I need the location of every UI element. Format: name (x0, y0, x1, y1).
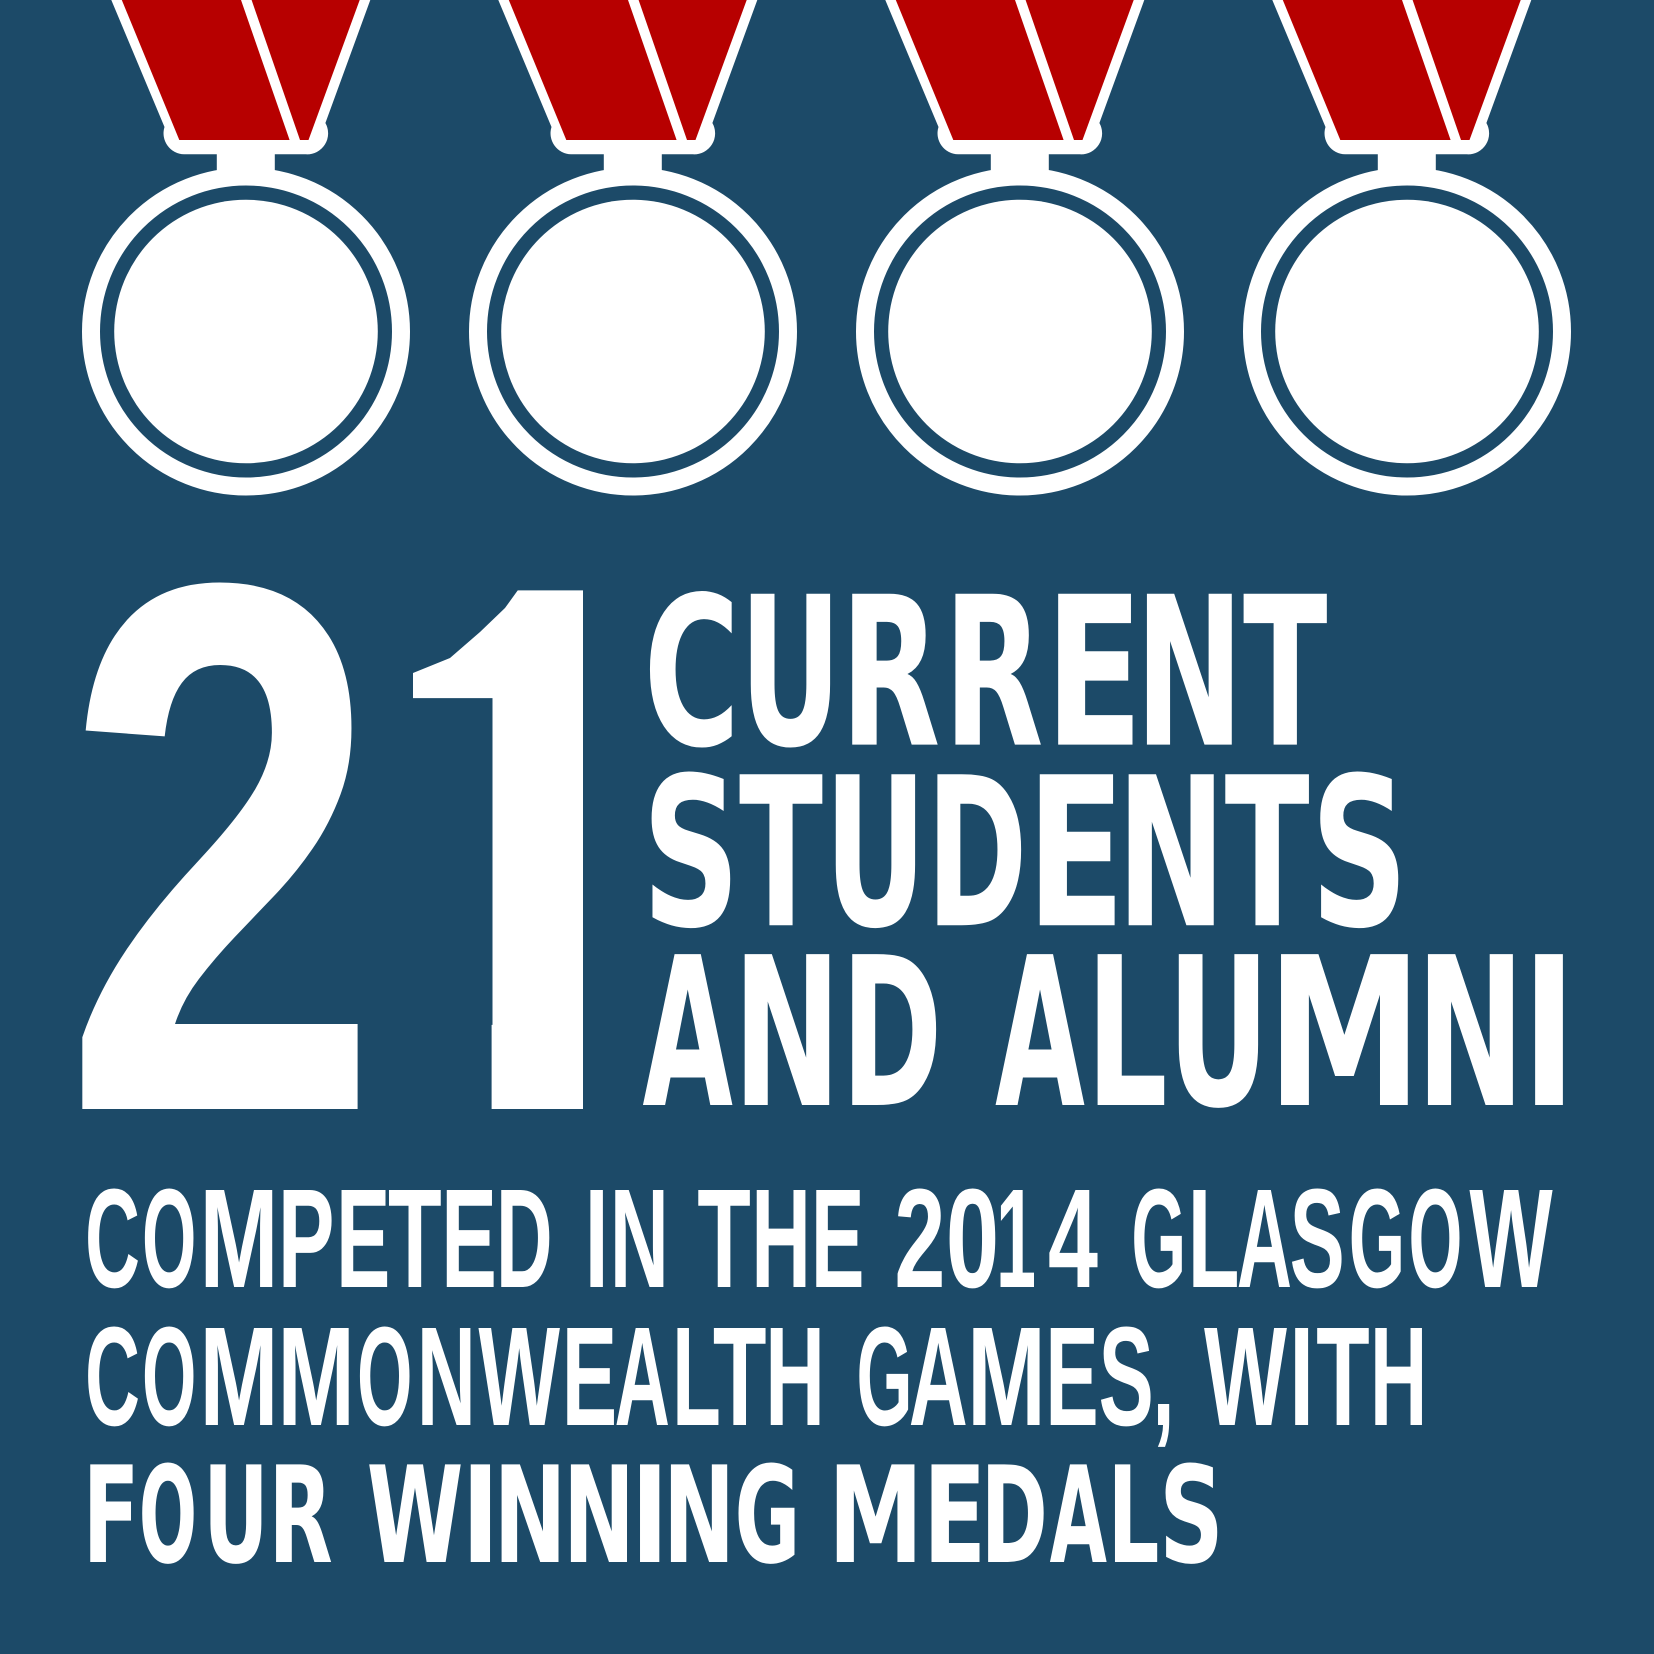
text line: COMPETED IN THE 2014 GLASGOW: D (496, 1159, 553, 1317)
text line: FOUR WINNING MEDALS: R (268, 1438, 333, 1594)
heading line: CURRENT: E (1045, 553, 1143, 794)
icon: medal 4 (1252, 0, 1562, 486)
heading line: CURRENT: T (1243, 553, 1328, 794)
big number 21: 2 (62, 426, 380, 1269)
text line: COMPETED IN THE 2014 GLASGOW: T (388, 1159, 442, 1317)
text line: COMPETED IN THE 2014 GLASGOW: N (610, 1159, 669, 1317)
heading line: STUDENTS: E (1026, 733, 1125, 974)
text line: COMPETED IN THE 2014 GLASGOW: I (585, 1159, 609, 1317)
text line: COMPETED IN THE 2014 GLASGOW: H (751, 1159, 811, 1317)
heading line: CURRENT: R (944, 553, 1044, 794)
text line: FOUR WINNING MEDALS: S (1159, 1438, 1224, 1594)
text line: COMMONWEALTH GAMES, WITH: N (417, 1297, 476, 1455)
text line: FOUR WINNING MEDALS: G (734, 1438, 800, 1594)
text line: COMPETED IN THE 2014 GLASGOW: 0 (946, 1159, 999, 1317)
text line: COMMONWEALTH GAMES, WITH: A (909, 1297, 968, 1455)
text line: COMPETED IN THE 2014 GLASGOW: 4 (1048, 1159, 1098, 1317)
text line: COMPETED IN THE 2014 GLASGOW: E (336, 1159, 390, 1317)
text line: FOUR WINNING MEDALS: I (461, 1438, 500, 1594)
text line: COMMONWEALTH GAMES, WITH: H (765, 1297, 825, 1455)
text line: COMPETED IN THE 2014 GLASGOW: C (85, 1159, 140, 1317)
big number 21: 1 (342, 297, 709, 1311)
text line: COMPETED IN THE 2014 GLASGOW: E (441, 1159, 497, 1317)
text line: COMPETED IN THE 2014 GLASGOW: S (1290, 1159, 1345, 1317)
text line: COMMONWEALTH GAMES, WITH: E (1045, 1297, 1099, 1455)
heading line: STUDENTS: T (739, 733, 823, 974)
text line: COMMONWEALTH GAMES, WITH: L (672, 1297, 721, 1455)
text line: FOUR WINNING MEDALS: I (631, 1438, 669, 1594)
heading line: AND ALUMNI: I (1522, 913, 1576, 1154)
text line: FOUR WINNING MEDALS: L (1108, 1438, 1159, 1594)
heading line: STUDENTS: U (824, 733, 927, 974)
heading line: AND ALUMNI: M (1267, 913, 1422, 1154)
heading line: STUDENTS: S (642, 733, 740, 974)
text line: COMPETED IN THE 2014 GLASGOW: L (1188, 1159, 1240, 1317)
text line: COMMONWEALTH GAMES, WITH: W (1204, 1297, 1287, 1455)
text line: COMMONWEALTH GAMES, WITH: G (856, 1297, 913, 1455)
heading line: CURRENT: U (739, 553, 842, 794)
text line: COMMONWEALTH GAMES, WITH: O (357, 1297, 412, 1455)
text line: COMMONWEALTH GAMES, WITH: , (1152, 1297, 1174, 1455)
text line: FOUR WINNING MEDALS: N (663, 1438, 735, 1594)
text line: FOUR WINNING MEDALS: E (923, 1438, 986, 1594)
icon: medal 1 (91, 0, 401, 486)
heading line: STUDENTS: N (1117, 733, 1226, 974)
text line: COMMONWEALTH GAMES, WITH: I (1289, 1297, 1314, 1455)
heading line: AND ALUMNI: A (995, 913, 1085, 1154)
heading line: CURRENT: N (1135, 553, 1244, 794)
text line: COMPETED IN THE 2014 GLASGOW: E (811, 1159, 864, 1317)
text line: COMMONWEALTH GAMES, WITH: W (478, 1297, 560, 1455)
text line: COMPETED IN THE 2014 GLASGOW: W (1469, 1159, 1553, 1317)
heading line: AND ALUMNI: U (1167, 913, 1270, 1154)
text line: FOUR WINNING MEDALS: D (981, 1438, 1048, 1594)
text line: COMPETED IN THE 2014 GLASGOW: T (697, 1159, 751, 1317)
text line: FOUR WINNING MEDALS: U (203, 1438, 269, 1594)
text line: COMMONWEALTH GAMES, WITH: C (85, 1297, 140, 1455)
heading line: AND ALUMNI: D (841, 913, 942, 1154)
text line: COMMONWEALTH GAMES, WITH: O (142, 1297, 196, 1455)
text line: COMPETED IN THE 2014 GLASGOW: O (142, 1159, 196, 1317)
heading line: CURRENT: R (840, 553, 940, 794)
text line: FOUR WINNING MEDALS: A (1050, 1438, 1107, 1594)
icon: medal 2 (478, 0, 788, 486)
text line: FOUR WINNING MEDALS: F (83, 1438, 140, 1594)
text line: COMMONWEALTH GAMES, WITH: M (277, 1297, 355, 1455)
heading line: CURRENT: C (643, 553, 740, 794)
text line: COMPETED IN THE 2014 GLASGOW: 2 (894, 1159, 945, 1317)
text line: COMMONWEALTH GAMES, WITH: T (713, 1297, 766, 1455)
text line: COMPETED IN THE 2014 GLASGOW: M (199, 1159, 279, 1317)
heading line: STUDENTS: S (1310, 733, 1408, 974)
text line: COMMONWEALTH GAMES, WITH: M (967, 1297, 1046, 1455)
text line: COMPETED IN THE 2014 GLASGOW: G (1131, 1159, 1186, 1317)
text line: COMPETED IN THE 2014 GLASGOW: 1 (996, 1159, 1036, 1317)
heading line: AND ALUMNI: N (733, 913, 841, 1154)
heading line: STUDENTS: T (1225, 733, 1310, 974)
text line: FOUR WINNING MEDALS: N (563, 1438, 635, 1594)
heading line: STUDENTS: D (926, 733, 1028, 974)
text line: FOUR WINNING MEDALS: N (494, 1438, 566, 1594)
icon: medal 3 (865, 0, 1175, 486)
text line: COMMONWEALTH GAMES, WITH: M (199, 1297, 279, 1455)
text line: COMMONWEALTH GAMES, WITH: A (614, 1297, 670, 1455)
text line: COMMONWEALTH GAMES, WITH: H (1370, 1297, 1427, 1455)
text line: COMMONWEALTH GAMES, WITH: S (1099, 1297, 1154, 1455)
text line: COMPETED IN THE 2014 GLASGOW: O (1408, 1159, 1462, 1317)
text line: COMPETED IN THE 2014 GLASGOW: G (1349, 1159, 1405, 1317)
text line: COMMONWEALTH GAMES, WITH: E (562, 1297, 617, 1455)
heading line: AND ALUMNI: A (642, 913, 733, 1154)
text line: COMMONWEALTH GAMES, WITH: T (1316, 1297, 1370, 1455)
text line: COMPETED IN THE 2014 GLASGOW: P (278, 1159, 334, 1317)
text line: FOUR WINNING MEDALS: W (367, 1438, 464, 1594)
heading line: AND ALUMNI: L (1086, 913, 1168, 1154)
text line: FOUR WINNING MEDALS: M (828, 1438, 923, 1594)
heading line: AND ALUMNI: N (1416, 913, 1525, 1154)
text line: FOUR WINNING MEDALS: O (139, 1438, 197, 1594)
text line: COMPETED IN THE 2014 GLASGOW: A (1237, 1159, 1292, 1317)
